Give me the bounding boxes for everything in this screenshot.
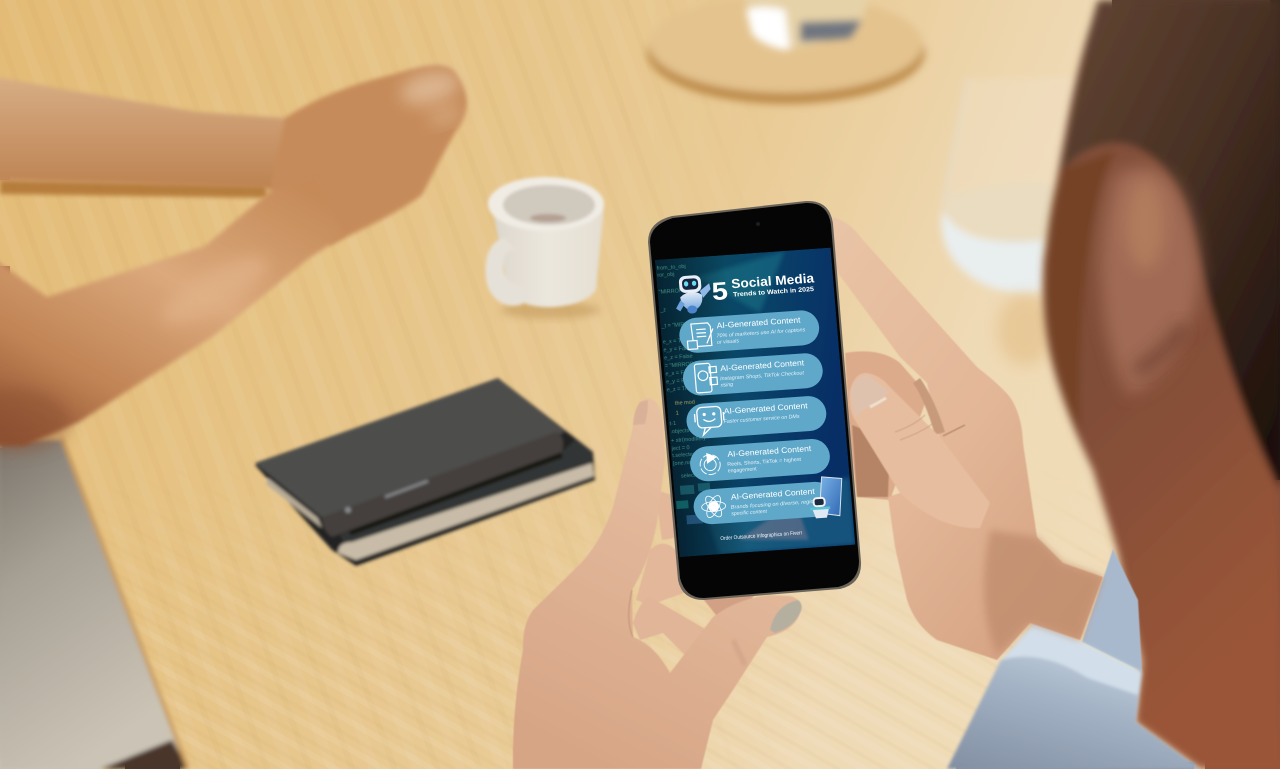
icon: document with AI badge bbox=[686, 323, 714, 349]
pill 2: social shopping: AI-Generated Content bbox=[720, 358, 805, 373]
pill 2: social shopping: rising bbox=[720, 382, 733, 389]
screen background bbox=[655, 248, 855, 557]
forearm and hand, top left bbox=[0, 65, 467, 245]
footer credit: Order Outsource Infographics on Fiverr bbox=[720, 530, 803, 542]
code text in background: e_y = False bbox=[663, 346, 692, 354]
code text in background: e_x = True bbox=[663, 338, 689, 346]
icon: chatbot with headset bbox=[694, 406, 725, 436]
code text in background: + str(modifier) bbox=[671, 436, 706, 444]
man's shirt and cuff bbox=[947, 549, 1200, 769]
title bbox=[713, 274, 814, 300]
pill 5: diverse content bbox=[694, 482, 821, 524]
robot mascot bbox=[676, 275, 711, 314]
coffee mug bbox=[486, 177, 604, 319]
glass shadow on table bbox=[997, 294, 1053, 366]
back of hand, thumb and index finger bbox=[513, 398, 801, 769]
pill 1: AI captions: AI-Generated Content bbox=[716, 315, 802, 330]
pill 3: customer service bbox=[685, 395, 828, 440]
icon: AI atom bbox=[701, 495, 726, 518]
cork coaster bbox=[647, 0, 925, 104]
man's head and hair bbox=[1043, 0, 1280, 769]
black notebook with pen bbox=[255, 378, 595, 566]
code text in background: t-1 bbox=[669, 421, 676, 427]
code text in background: ject = 0 bbox=[671, 445, 690, 452]
small robot with phone bbox=[810, 476, 842, 518]
code text in background: 1 bbox=[676, 411, 679, 417]
icon: phone with shopping bbox=[694, 363, 718, 393]
pill 5: diverse content: AI-Generated Content bbox=[731, 487, 816, 502]
pill 4: short video: engagement bbox=[728, 466, 757, 474]
pill 5: diverse content: Brands focusing on diverse, region- bbox=[731, 499, 819, 511]
code text in background: from_to_obj bbox=[656, 264, 686, 272]
code text in background: the mod bbox=[675, 400, 695, 407]
code text in background: _z bbox=[659, 307, 667, 314]
code text in background: e_z = True bbox=[667, 386, 693, 393]
title: Trends to Watch in 2025 bbox=[733, 286, 815, 299]
pill 3: customer service: AI-Generated Content bbox=[723, 401, 809, 416]
phone notch camera bbox=[756, 222, 760, 226]
title: Social Media bbox=[731, 270, 815, 291]
code text in background: .objects bbox=[670, 428, 690, 435]
pill 1: AI captions bbox=[678, 309, 821, 354]
code text in background: e_z = False bbox=[664, 354, 693, 362]
screen infographic bbox=[655, 248, 855, 557]
pen clipped to notebook bbox=[322, 432, 563, 537]
code text in background: ror_obj bbox=[657, 272, 675, 279]
pill 4: short video: AI-Generated Content bbox=[727, 444, 812, 459]
man's right hand on the phone bbox=[830, 217, 1103, 660]
drinking glass on coaster bbox=[744, 0, 872, 50]
ear bbox=[1101, 166, 1200, 395]
code text in background bbox=[656, 264, 710, 524]
fingers behind thumb bbox=[636, 490, 692, 605]
pill 2: social shopping: Instagram Shops, TikTok Checkout bbox=[720, 370, 805, 382]
forearm and elbow, left bbox=[0, 180, 345, 452]
code text in background: select bbox=[681, 473, 696, 480]
code text in background: e_y = False bbox=[666, 378, 695, 386]
pill 1: AI captions: 70% of marketers use AI for captions bbox=[716, 327, 806, 339]
pill 4: short video bbox=[689, 438, 831, 482]
glass of water bbox=[941, 78, 1085, 293]
pill 1: AI captions: or visuals bbox=[717, 338, 740, 346]
smartphone bbox=[648, 201, 861, 600]
fingers behind thumb bbox=[845, 351, 928, 500]
title: 5 bbox=[711, 277, 729, 306]
thumb bbox=[849, 373, 990, 528]
pill 3: customer service: Faster customer service on DMs bbox=[723, 414, 800, 425]
code text in background: _t = "MIRROR_Z" bbox=[660, 321, 705, 330]
seated person's shirt, lower left bbox=[0, 438, 189, 769]
wrist shading bbox=[984, 530, 1103, 655]
icon: play button with circular arrow bbox=[699, 452, 721, 475]
code text in background: "MIRROR" bbox=[658, 288, 685, 296]
pill 5: diverse content: specific content bbox=[731, 509, 768, 517]
back of hand and index finger bbox=[830, 217, 1103, 660]
code text in background: e_x = False bbox=[665, 370, 694, 378]
pill 4: short video: Reels, Shorts, TikTok = highest bbox=[727, 457, 802, 468]
man's left hand holding the phone bbox=[513, 398, 802, 769]
pill 2: social shopping bbox=[682, 352, 824, 397]
code text in background: = "MIRROR_Y" bbox=[665, 361, 703, 370]
code text in background: [one.name] bbox=[673, 459, 701, 467]
code text in background: t.selected bbox=[672, 452, 696, 459]
mug handle bbox=[486, 238, 530, 306]
